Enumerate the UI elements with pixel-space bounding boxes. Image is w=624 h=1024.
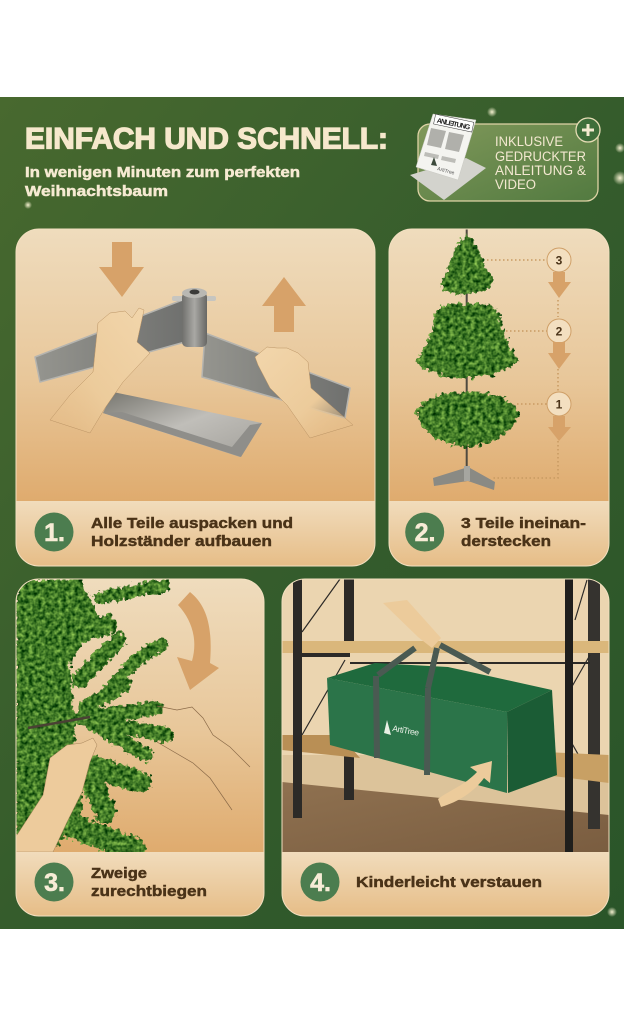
marker 1 — [547, 392, 571, 441]
arrow: down — [99, 242, 144, 297]
sparkles — [22, 107, 624, 917]
tree section: bottom — [416, 392, 519, 447]
bag logo — [384, 720, 419, 736]
step 2 text — [461, 515, 586, 550]
foliage — [16, 579, 166, 852]
step number 2 — [405, 512, 444, 552]
icon: plus badge — [576, 118, 600, 142]
callout text: GEDRUCKTER — [495, 149, 586, 164]
tree trunk — [466, 229, 468, 472]
callout: printed manual and video — [410, 114, 600, 201]
icon: manual pages — [410, 114, 486, 200]
panel: step 2 stack tree — [389, 229, 609, 566]
caption bar — [16, 501, 375, 566]
arrow: curved down — [177, 592, 219, 690]
panel: step 4 store in bag — [282, 579, 609, 916]
wood floor — [282, 782, 609, 852]
step 1 text: Alle Teile auspacken und — [91, 515, 293, 532]
stand: right wing — [202, 333, 350, 418]
callout text: INKLUSIVE — [495, 134, 563, 149]
marker 3 — [547, 248, 571, 298]
icon: left hand — [50, 308, 150, 433]
icon: arm lifting bag — [383, 600, 441, 648]
marker 2 — [547, 319, 571, 369]
title: EINFACH UND SCHNELL: — [25, 122, 388, 156]
step number 1 — [34, 512, 74, 552]
caption bar — [389, 501, 609, 566]
step 1 text: Holzständer aufbauen — [91, 533, 272, 550]
step 3 text: zurechtbiegen — [91, 883, 207, 900]
marker 2: 2 — [556, 324, 563, 338]
callout text: VIDEO — [495, 177, 536, 192]
tree section: middle — [416, 303, 519, 378]
stand: lower foot — [103, 392, 262, 457]
step 2 text: 3 Teile ineinan- — [461, 515, 586, 532]
tree stand — [433, 466, 495, 490]
caption bar — [16, 852, 264, 916]
icon: manual pages: ANLEITUNG — [436, 118, 471, 132]
branch stem — [28, 717, 90, 728]
subtitle — [25, 164, 300, 200]
callout text — [495, 134, 586, 192]
panel: step 1 assemble stand — [16, 229, 375, 566]
wall — [282, 579, 609, 769]
step number 1: 1. — [44, 519, 65, 547]
icon: hand left — [16, 738, 97, 852]
step number 4 — [300, 862, 340, 902]
step 3 text: Zweige — [91, 865, 147, 882]
stand: left wing — [35, 299, 185, 382]
marker 3: 3 — [556, 254, 563, 268]
arrow: up — [262, 277, 306, 332]
step number 3 — [34, 862, 74, 902]
bricks — [282, 755, 608, 815]
step number 2: 2. — [415, 519, 435, 547]
tree section: top — [441, 234, 493, 294]
caption bar — [282, 852, 609, 916]
step 3 text — [91, 865, 207, 900]
storage bag — [327, 645, 557, 793]
icon: manual pages: ArtiTree — [436, 166, 455, 177]
bag logo: ArtiTree — [392, 723, 420, 738]
step 1 text — [91, 515, 293, 550]
subtitle: In wenigen Minuten zum perfekten — [25, 164, 300, 181]
step number 4: 4. — [310, 869, 331, 897]
step 2 text: derstecken — [461, 533, 551, 550]
panel: step 3 bend branches — [16, 579, 264, 916]
callout text: ANLEITUNG & — [495, 163, 586, 178]
icon: right hand — [255, 347, 353, 438]
subtitle: Weihnachtsbaum — [25, 183, 168, 200]
shelving unit — [282, 579, 609, 852]
icon: hand right outline — [157, 706, 250, 810]
step number 3: 3. — [44, 869, 65, 897]
step 4 text: Kinderleicht verstauen — [356, 874, 542, 891]
stand: centre post — [172, 288, 216, 347]
arrow: into shelf — [438, 761, 492, 807]
bag straps — [376, 645, 490, 775]
marker 1: 1 — [556, 398, 563, 412]
dotted guide lines — [487, 260, 558, 478]
